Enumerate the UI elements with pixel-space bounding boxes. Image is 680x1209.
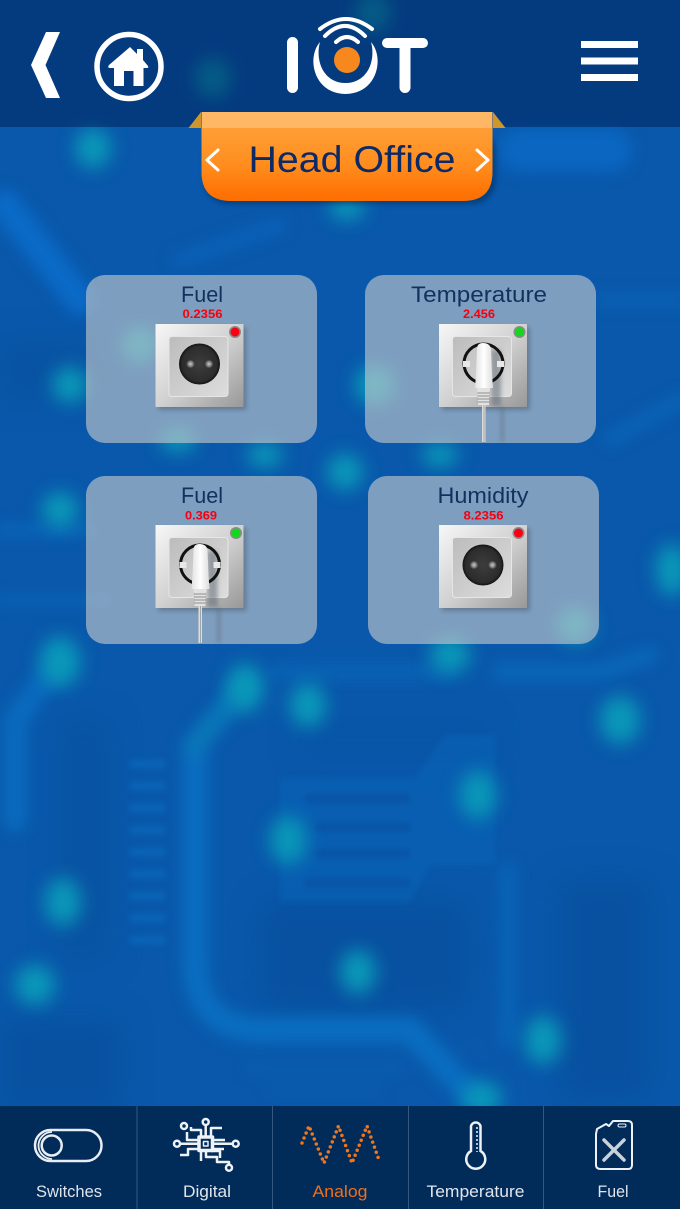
label: humidity: Humidity	[438, 483, 528, 508]
icon: previous arrow	[207, 150, 218, 170]
value: 0.2356: 0.2356	[182, 307, 223, 321]
header bar	[0, 0, 680, 127]
tab: switches	[35, 1130, 102, 1201]
tab: analog (active): Analog	[312, 1182, 368, 1201]
value: 8.2356: 8.2356	[464, 508, 504, 522]
ribbon title: Head Office	[248, 139, 456, 180]
tab: switches: Switches	[36, 1182, 102, 1201]
label: temperature: Temperature	[411, 282, 547, 307]
panel: fuel sensor off	[86, 275, 317, 443]
panel: humidity sensor off	[368, 476, 599, 644]
label: fuel: Fuel	[181, 282, 223, 307]
tab: fuel	[596, 1121, 632, 1201]
tab: digital: Digital	[183, 1182, 231, 1201]
bottom navigation	[0, 1106, 680, 1209]
icon: back arrow	[31, 32, 60, 98]
panel: temperature sensor on	[365, 275, 596, 443]
icon: home	[97, 34, 161, 98]
logo: IOT	[287, 19, 428, 94]
tab: fuel: Fuel	[598, 1182, 628, 1201]
value: 0.369: 0.369	[185, 508, 217, 522]
panel: fuel sensor on	[86, 476, 317, 644]
icon: empty socket with red light	[156, 324, 246, 410]
icon: plugged socket with green light	[439, 324, 530, 442]
tab: analog (active)	[302, 1126, 379, 1201]
icon: menu	[581, 41, 638, 81]
icon: plugged socket with green light	[156, 525, 246, 643]
ribbon: location selector	[188, 112, 506, 204]
value: 2.456: 2.456	[463, 307, 495, 321]
tab: digital	[174, 1119, 239, 1201]
tab: temperature: Temperature	[426, 1182, 524, 1201]
label: fuel: Fuel	[181, 483, 223, 508]
tab: temperature	[426, 1123, 524, 1201]
icon: next arrow	[477, 150, 488, 170]
icon: empty socket with red light	[439, 525, 530, 611]
